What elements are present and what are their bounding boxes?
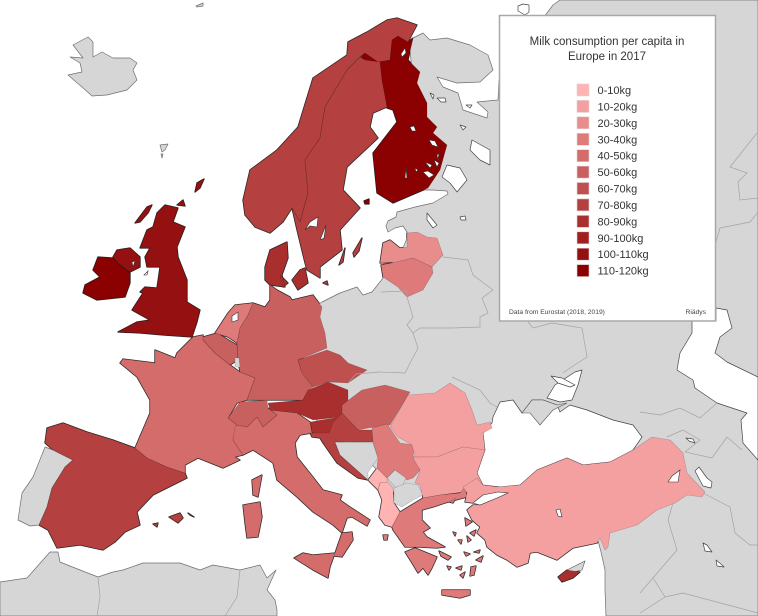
Slovenia: 80-90kg <box>310 417 340 437</box>
legend scale: 20-30kg <box>598 118 637 130</box>
author credit: Riädys <box>686 309 707 316</box>
Romania: 10-20kg <box>390 383 492 457</box>
legend scale: 0-10kg <box>598 85 631 97</box>
Croatia: 70-80kg <box>310 413 373 480</box>
Poland, Belarus, Ukraine borders <box>348 257 587 383</box>
north Cyprus <box>567 561 585 572</box>
Czech Republic: 60-70kg <box>298 350 367 387</box>
Germany: 50-60kg <box>237 285 327 400</box>
Kosovo: no data <box>387 470 406 487</box>
legend scale: 90-100kg <box>598 233 643 245</box>
Crimea <box>522 400 567 425</box>
Faroe Islands and Jan Mayen <box>160 3 203 158</box>
Cyprus: 80-90kg <box>558 570 580 582</box>
Norway: 70-80kg <box>243 18 417 233</box>
Spain: 70-80kg <box>39 423 194 550</box>
legend scale <box>577 84 649 278</box>
Sea of Azov <box>547 370 582 402</box>
legend scale: 80-90kg <box>598 216 637 228</box>
Finnish lakes <box>401 48 439 178</box>
legend scale: 40-50kg <box>598 151 637 163</box>
Finland: 110-120kg <box>362 36 447 204</box>
Lithuania: 30-40kg <box>381 258 433 297</box>
Hungary: 50-60kg <box>342 385 410 430</box>
Republic of Ireland: 110-120kg <box>83 257 130 300</box>
Austria: 80-90kg <box>268 382 348 420</box>
country borders on no-data land <box>97 133 758 616</box>
lakes inside Scandinavia, Finland, Turkey and islands <box>132 48 680 517</box>
Sweden: 70-80kg <box>292 57 387 285</box>
seas and lakes <box>427 4 758 567</box>
legend scale: 30-40kg <box>598 134 637 146</box>
Denmark: 80-90kg <box>265 242 308 290</box>
Turkey: 10-20kg <box>463 437 705 567</box>
Montenegro: 0-10kg <box>368 468 388 490</box>
Northern Ireland: 100-110kg <box>113 248 140 272</box>
North Macedonia: no data <box>394 483 423 507</box>
Latvia: 20-30kg <box>380 232 443 267</box>
Serbia: 30-40kg <box>372 424 420 480</box>
North Africa <box>0 552 277 616</box>
legend scale: 70-80kg <box>598 200 637 212</box>
Moldova and Russia east borders <box>452 133 758 407</box>
France: 40-50kg <box>120 335 262 497</box>
Iceland <box>68 37 137 96</box>
Bulgaria: 10-20kg <box>413 447 485 498</box>
Great Britain: 100-110kg <box>118 179 204 337</box>
Portugal <box>18 447 73 526</box>
Albania: 0-10kg <box>378 482 400 527</box>
Greece: 30-40kg <box>383 487 483 598</box>
legend panel <box>500 16 716 321</box>
IJsselmeer <box>232 312 238 322</box>
Caucasus and Middle East borders <box>640 403 758 613</box>
legend scale: 60-70kg <box>598 184 637 196</box>
North Africa borders <box>97 570 240 616</box>
Netherlands: 30-40kg <box>215 303 253 343</box>
Black Sea <box>477 400 642 487</box>
Italy: 40-50kg <box>233 408 370 578</box>
Swedish lakes Vanern and Vattern <box>305 217 326 240</box>
legend title: Europe in 2017 <box>568 51 646 63</box>
Belfast lough and Irish Sea isle <box>132 261 148 275</box>
Caspian Sea <box>677 308 758 460</box>
Sea of Marmara <box>473 492 508 505</box>
legend scale: 100-110kg <box>598 249 649 261</box>
legend scale: 110-120kg <box>598 266 649 278</box>
Belgium: 50-60kg <box>203 333 238 365</box>
Crimea and north Cyprus <box>522 400 585 572</box>
legend scale: 10-20kg <box>598 101 637 113</box>
Lakes Ladoga, Onega, Peipus and others <box>427 4 724 567</box>
Lakes Van and Tuz in Turkey <box>556 470 680 517</box>
legend scale: 50-60kg <box>598 167 637 179</box>
Switzerland: 50-60kg <box>228 400 277 427</box>
Russia, Eastern Europe and Middle East landmass <box>300 0 758 616</box>
Bosnia and Herzegovina: no data <box>335 442 378 480</box>
legend title: Milk consumption per capita in <box>530 36 684 48</box>
Luxembourg: no data <box>235 358 240 367</box>
source note: Data from Eurostat (2018, 2019) <box>509 309 605 316</box>
